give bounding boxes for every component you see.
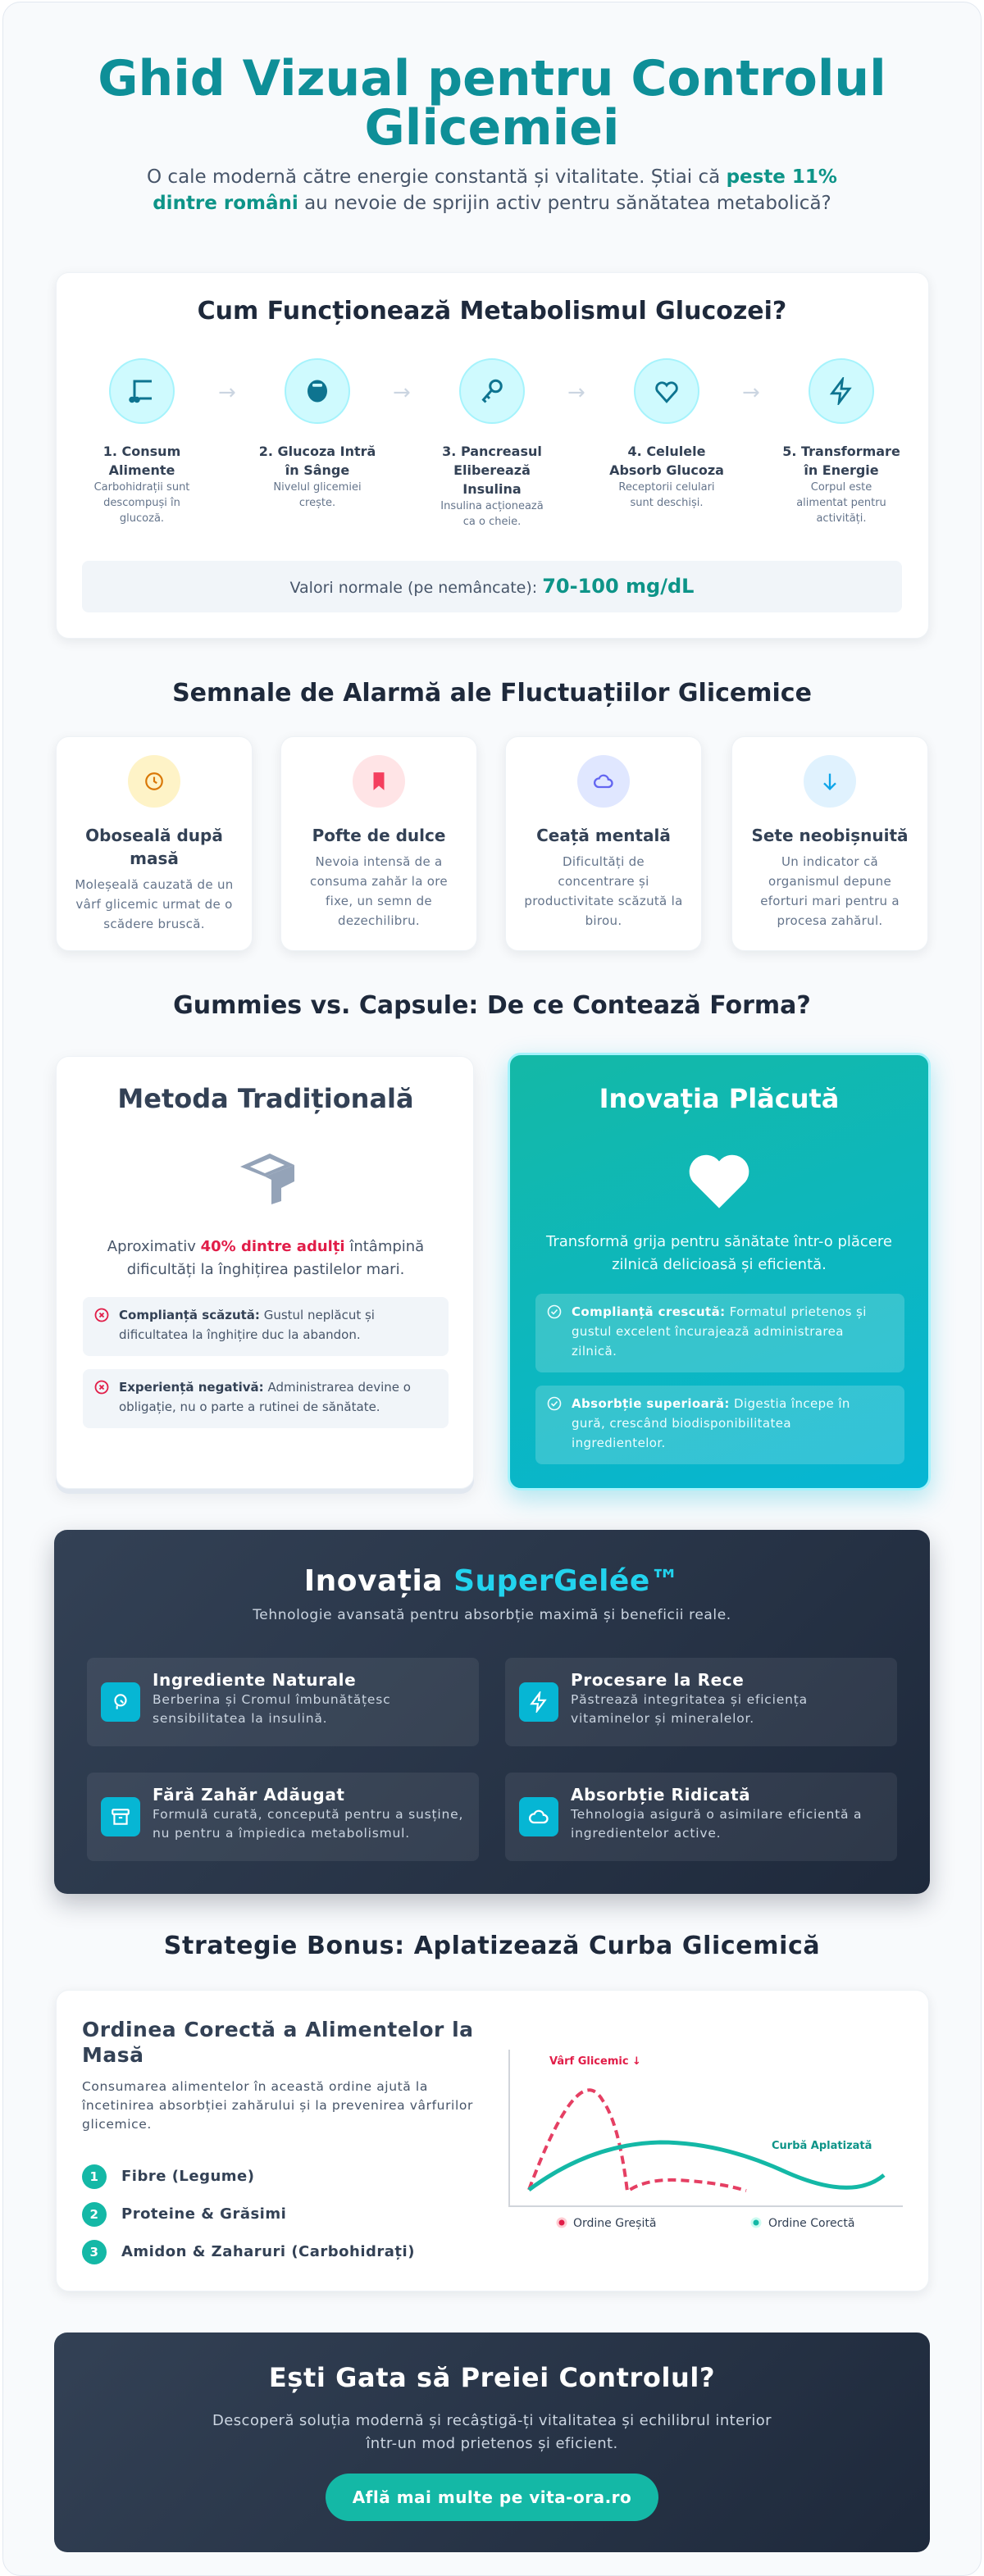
step 4: Receptorii celulari: [618, 481, 715, 494]
feature: cold processing: [505, 1658, 897, 1746]
description: încetinirea absorbției zahărului și la prevenirea vârfurilor glicemice.: [82, 2098, 473, 2132]
panel: traditional method: [56, 1056, 474, 1489]
feature: no added sugar: Formulă curată, concepută pentru a susține, nu pentru a împiedica metabolismul.: [153, 1807, 463, 1841]
icon: heart: [689, 1154, 749, 1208]
step 1: [94, 358, 190, 525]
item: superior absorption: Absorbție superioară: Digestia începe în gură, crescând biodisponibilitatea ingredientelor.: [572, 1396, 850, 1450]
heading: metabolism: Cum Funcționează Metabolismul Glucozei?: [198, 297, 786, 325]
title: Glicemiei: [364, 99, 620, 157]
step 5: Corpul este: [811, 481, 872, 494]
list: Fibre (Legume): [121, 2168, 254, 2185]
heading: Ordinea Corectă a Alimentelor la Masă: [82, 2018, 474, 2067]
chart: glycemic curve: Curbă Aplatizată: [772, 2140, 872, 2152]
card: brain fog: Ceață mentală: [536, 826, 671, 845]
item: superior absorption: [535, 1386, 904, 1464]
item: increased compliance: Complianță crescută: Formatul prietenos și gustul excelent încurajează administrarea zilnică.: [572, 1304, 867, 1359]
text: Aproximativ 40% dintre adulți întâmpină dificultăți la înghițirea pastilelor mari.: [107, 1238, 424, 1278]
card: fatigue: [56, 736, 253, 951]
step 4: sunt deschiși.: [630, 497, 704, 509]
arrow: →: [742, 380, 760, 405]
step 4: Absorb Glucoza: [609, 462, 724, 478]
feature: natural ingredients: Ingrediente Naturale: [153, 1670, 356, 1690]
feature: cold processing: Păstrează integritatea și eficiența vitaminelor și mineralelor.: [571, 1692, 808, 1726]
step 5: 5. Transformare: [782, 444, 900, 459]
normal values box: Valori normale (pe nemâncate): 70-100 mg/dL: [290, 575, 694, 598]
step 5: alimentat pentru: [796, 497, 886, 509]
feature: cold processing: Procesare la Rece: [571, 1670, 744, 1690]
list: 3: [90, 2245, 98, 2260]
step 3: [440, 358, 544, 528]
title: [98, 50, 886, 157]
step 1: 1. Consum: [103, 444, 180, 459]
arrow: →: [393, 380, 411, 405]
text: Descoperă soluția modernă și recâștigă-ți vitalitatea și echilibrul interior într-un mod prietenos și eficient.: [212, 2412, 772, 2452]
step 3: Eliberează: [453, 462, 531, 478]
step 2: în Sânge: [285, 462, 349, 478]
card: brain fog: [505, 736, 702, 951]
subtitle: O cale modernă către energie constantă și vitalitate. Știai că peste 11% dintre români au nevoie de sprijin activ pentru sănătatea metabolică?: [147, 166, 837, 214]
list: [82, 2164, 415, 2264]
card: brain fog: Dificultăți de: [563, 854, 645, 869]
item: increased compliance: [535, 1294, 904, 1372]
title: Ghid Vizual pentru Controlul: [98, 50, 886, 107]
heading: alarm signals: Semnale de Alarmă ale Fluctuațiilor Glicemice: [172, 679, 812, 708]
chart: glycemic curve: [508, 2050, 903, 2230]
step 4: [609, 358, 724, 509]
panel: glucose metabolism: [56, 272, 929, 639]
feature: no added sugar: Fără Zahăr Adăugat: [153, 1785, 345, 1805]
feature: no added sugar: [87, 1773, 479, 1861]
arrow: →: [218, 380, 236, 405]
step 4: 4. Celulele: [628, 444, 705, 459]
card: sugar cravings: [280, 736, 477, 951]
heading: Inovația Plăcută: [599, 1083, 839, 1114]
arrow: →: [567, 380, 585, 405]
card: fatigue: Oboseală după masă: [85, 826, 223, 868]
step 1: Alimente: [109, 462, 175, 478]
subheading: Tehnologie avansată pentru absorbție maximă și beneficii reale.: [253, 1607, 731, 1623]
panel: call to action: [54, 2333, 930, 2552]
step 2: Nivelul glicemiei: [273, 481, 362, 494]
step 2: 2. Glucoza Intră: [259, 444, 376, 459]
panel: food order: [56, 1990, 929, 2292]
list: Amidon & Zaharuri (Carbohidrați): [121, 2243, 415, 2260]
heading: Ești Gata să Preiei Controlul?: [269, 2362, 715, 2393]
step 1: Carbohidrații sunt descompuși în glucoză.: [94, 481, 189, 525]
list: Proteine & Grăsimi: [121, 2205, 286, 2223]
normal values box: [82, 561, 902, 612]
item: negative experience: Experiență negativă: Administrarea devine o obligație, nu o parte a rutinei de sănătate.: [119, 1380, 411, 1414]
icon: pill box: [240, 1154, 294, 1204]
description: [82, 2079, 473, 2132]
heading: Metoda Tradițională: [117, 1083, 414, 1114]
item: low compliance: Complianță scăzută: Gustul neplăcut și dificultatea la înghițire duc la abandon.: [119, 1308, 375, 1342]
feature: natural ingredients: Berberina și Cromul îmbunătățesc sensibilitatea la insulină.: [153, 1692, 390, 1726]
feature: high absorption: [505, 1773, 897, 1861]
panel: pleasant innovation: [508, 1053, 931, 1491]
heading: Inovația SuperGelée™: [304, 1564, 680, 1598]
step 5: în Energie: [804, 462, 879, 478]
card: brain fog: concentrare și productivitate scăzută la birou.: [524, 874, 683, 928]
text: Transformă grija pentru sănătate într-o plăcere zilnică delicioasă și eficientă.: [546, 1233, 892, 1273]
step 3: 3. Pancreasul: [442, 444, 542, 459]
card: thirst: [731, 736, 928, 951]
feature: natural ingredients: [87, 1658, 479, 1746]
step 2: crește.: [299, 497, 335, 509]
list: 1: [90, 2169, 98, 2184]
step 3: ca o cheie.: [463, 516, 521, 528]
card: fatigue: Moleșeală cauzată de un vârf glicemic urmat de o scădere bruscă.: [75, 877, 234, 931]
card: thirst: Sete neobișnuită: [751, 826, 909, 845]
heading: bonus strategy: Strategie Bonus: Aplatizează Curba Glicemică: [164, 1932, 820, 1960]
chart: glycemic curve: Ordine Greșită: [573, 2217, 656, 2230]
button: Află mai multe pe vita-ora.ro: [353, 2487, 631, 2507]
step 3: Insulina: [462, 481, 522, 497]
chart: glycemic curve: Vârf Glicemic ↓: [549, 2055, 641, 2068]
list: 2: [90, 2207, 98, 2222]
panel: SuperGelée innovation: [54, 1530, 930, 1894]
button: [326, 2474, 658, 2521]
item: low compliance: [83, 1297, 449, 1356]
step 5: [782, 358, 900, 525]
step 3: Insulina acționează: [440, 500, 544, 512]
chart: glycemic curve: Ordine Corectă: [768, 2217, 854, 2230]
card: thirst: Un indicator că organismul depune eforturi mari pentru a procesa zahărul.: [760, 854, 900, 928]
step 2: [259, 358, 376, 509]
description: Consumarea alimentelor în această ordine ajută la: [82, 2079, 428, 2094]
card: sugar cravings: Nevoia intensă de a consuma zahăr la ore fixe, un semn de dezechilibru.: [310, 854, 448, 928]
feature: high absorption: Tehnologia asigură o asimilare eficientă a ingredientelor active.: [571, 1807, 862, 1841]
item: negative experience: [83, 1369, 449, 1428]
feature: high absorption: Absorbție Ridicată: [571, 1785, 750, 1805]
card: sugar cravings: Pofte de dulce: [312, 826, 445, 845]
heading: gummies vs capsules: Gummies vs. Capsule: De ce Contează Forma?: [173, 991, 811, 1020]
step 5: activități.: [816, 512, 867, 525]
